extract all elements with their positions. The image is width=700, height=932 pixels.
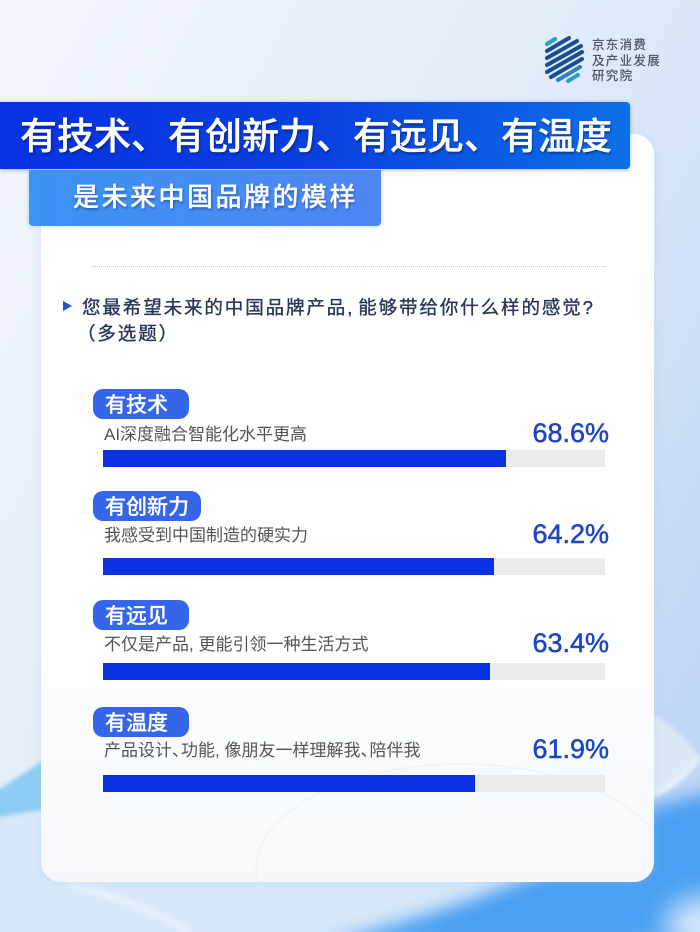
value: 63.4%	[532, 628, 609, 658]
value: 64.2%	[532, 519, 609, 549]
subtitle banner: 是未来中国品牌的模样	[73, 182, 358, 212]
logo text: 及产业发展	[592, 54, 661, 68]
title banner	[0, 102, 630, 169]
label: 有技术	[105, 394, 168, 417]
item 2	[93, 491, 609, 575]
label	[93, 389, 189, 419]
bar	[103, 558, 605, 575]
logo	[544, 36, 661, 84]
label: 有创新力	[105, 496, 189, 519]
subtitle banner	[29, 170, 381, 226]
description: AI深度融合智能化水平更高	[104, 425, 307, 444]
card wave decoration	[260, 763, 654, 848]
description: 不仅是产品, 更能引领一种生活方式	[104, 635, 368, 654]
bar	[103, 775, 605, 792]
logo text	[592, 38, 661, 83]
panel: white card	[41, 134, 654, 882]
item 4	[93, 707, 609, 792]
label	[93, 491, 201, 521]
logo text: 京东消费	[592, 38, 647, 52]
label: 有远见	[105, 605, 168, 628]
description: 产品设计、功能, 像朋友一样理解我、陪伴我	[104, 741, 420, 760]
dotted divider	[92, 266, 606, 267]
question	[63, 297, 595, 344]
bar	[103, 663, 605, 680]
logo text: 研究院	[592, 69, 633, 83]
icon: triangle marker	[63, 301, 72, 311]
question text: 您最希望未来的中国品牌产品,能够带给你什么样的感觉?	[82, 297, 595, 318]
label	[93, 707, 189, 737]
bar	[103, 450, 605, 467]
icon: striped logo mark	[544, 36, 584, 84]
description: 我感受到中国制造的硬实力	[104, 526, 308, 545]
item 3	[93, 600, 609, 680]
title banner: 有技术、有创新力、有远见、有温度	[20, 116, 612, 157]
question text: （多选题）	[77, 323, 179, 344]
label	[93, 600, 189, 630]
question text	[77, 297, 595, 344]
label: 有温度	[105, 712, 168, 735]
value: 68.6%	[532, 418, 609, 448]
item 1	[93, 389, 609, 467]
value: 61.9%	[532, 734, 609, 764]
